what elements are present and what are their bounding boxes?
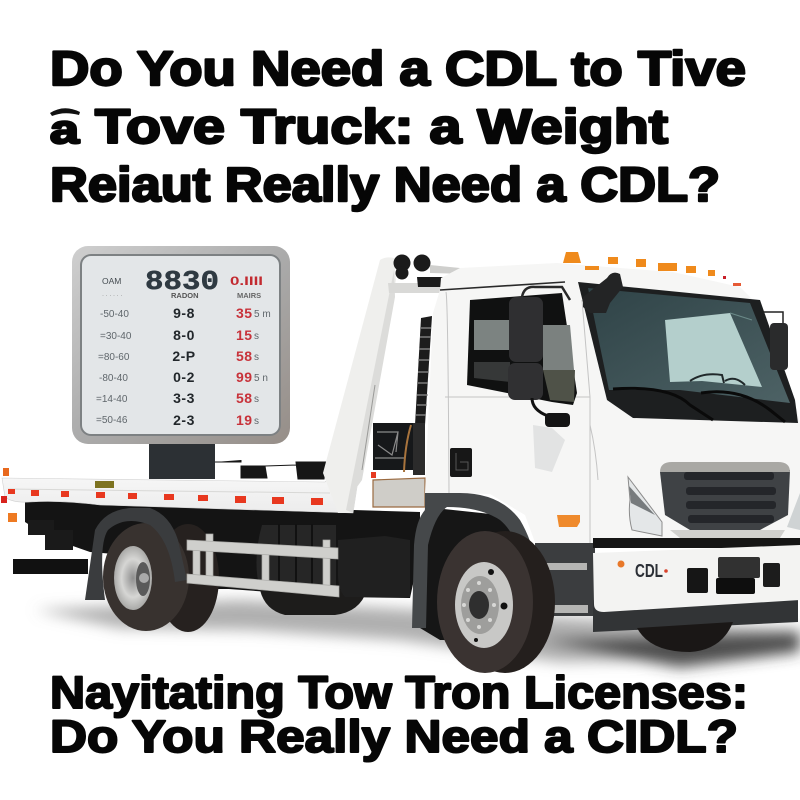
side window xyxy=(467,293,577,405)
sign board xyxy=(72,246,290,479)
sign table rows: s xyxy=(254,416,259,427)
rear lights xyxy=(3,468,9,476)
battery box xyxy=(338,536,410,597)
sign screen xyxy=(82,256,279,434)
ground shadow xyxy=(35,600,800,668)
hitch blocks xyxy=(28,520,73,550)
sign table rows: 15 xyxy=(236,327,253,343)
sign table rows: s xyxy=(254,394,259,405)
sign table rows: s xyxy=(254,331,259,342)
cab body xyxy=(425,252,800,548)
fuel tank xyxy=(256,524,336,590)
sign header readout xyxy=(102,268,263,300)
arch cavity xyxy=(420,507,537,640)
front tyre xyxy=(437,531,555,673)
bottom title xyxy=(50,667,748,762)
top title: Reiaut Really Need a CDL? xyxy=(50,159,720,212)
sign table rows: =14-40 xyxy=(96,394,128,405)
top title: a xyxy=(50,108,80,152)
sign table rows: 19 xyxy=(236,412,253,428)
sign header readout: OAM xyxy=(102,276,121,286)
cab steps xyxy=(538,563,587,570)
front rim xyxy=(455,562,513,648)
bumper body xyxy=(593,545,800,612)
sign table rows: 35 xyxy=(236,305,253,321)
chassis underside xyxy=(25,500,420,598)
bottom title: Nayitating Tow Tron Licenses: xyxy=(50,667,748,718)
rear chassis and running gear xyxy=(13,500,420,632)
sign table rows: 5 n xyxy=(254,373,268,384)
sign header readout: RADON xyxy=(171,291,198,300)
sign table rows: 8-0 xyxy=(173,327,195,343)
flatbed deck xyxy=(1,468,357,522)
roof lights xyxy=(563,252,741,286)
deck yellow label xyxy=(95,481,114,488)
bumper openings xyxy=(687,568,708,593)
top title: Do You Need a CDL to Tive xyxy=(50,43,746,96)
sign table rows: =80-60 xyxy=(98,352,130,363)
rear dual tyre xyxy=(157,524,219,632)
door seams xyxy=(445,292,598,543)
roof seam xyxy=(440,282,565,290)
headlight right xyxy=(787,493,800,530)
sign table rows: =50-46 xyxy=(96,415,128,426)
side guard rails xyxy=(187,534,339,597)
chassis strip xyxy=(593,538,800,548)
sign table rows: 58 xyxy=(236,390,253,406)
windshield frame xyxy=(578,282,798,423)
sign table rows: 99 xyxy=(236,369,253,385)
sign table rows: 9-8 xyxy=(173,305,195,321)
door handle xyxy=(450,448,472,477)
bumper CDL lettering: CDL xyxy=(635,561,663,581)
sign header readout: 0.IIII xyxy=(230,274,263,288)
front bumper xyxy=(593,538,800,652)
sign header readout: · · · · · · xyxy=(102,293,122,299)
bumper lamp xyxy=(618,560,624,568)
sign table rows: 3-3 xyxy=(173,390,195,406)
wipers xyxy=(613,388,785,422)
sign table rows: 58 xyxy=(236,348,253,364)
windshield glass xyxy=(588,288,790,403)
rear fender xyxy=(85,508,187,600)
headlight left xyxy=(628,477,662,536)
work lights xyxy=(394,254,447,287)
machinery behind headboard xyxy=(215,316,432,479)
rear hitch bar xyxy=(13,559,88,574)
sign header readout: MAIRS xyxy=(237,291,261,300)
sign table rows: =30-40 xyxy=(100,331,132,342)
sign table rows: 2-3 xyxy=(173,412,195,428)
rear storage box xyxy=(373,478,425,507)
sign table rows xyxy=(96,305,271,428)
mirror shadow on door xyxy=(533,425,565,472)
sign table rows: 5 m xyxy=(254,309,271,320)
main side mirror xyxy=(508,287,570,427)
windshield reflection xyxy=(665,313,762,387)
sign table rows: -50-40 xyxy=(100,309,129,320)
rear rim xyxy=(114,546,152,610)
ribbed hoses xyxy=(415,316,432,425)
top title: Tove Truck: a Weight xyxy=(95,101,668,154)
crossbars xyxy=(388,283,440,293)
bottom title: Do You Really Need a CIDL? xyxy=(50,711,738,762)
rear tyre xyxy=(103,523,189,631)
top convex mirror xyxy=(583,273,623,313)
headboard tower xyxy=(323,254,470,513)
sign post xyxy=(149,442,215,479)
side marker xyxy=(557,515,580,527)
deck reflectors xyxy=(8,489,323,505)
license plate xyxy=(718,557,760,578)
front wheel arch and steps xyxy=(412,493,595,640)
deck orange plate xyxy=(332,481,344,495)
deck winch box xyxy=(215,460,327,479)
fender band xyxy=(412,493,538,628)
sign header readout: 8830 xyxy=(145,268,219,298)
step well xyxy=(535,543,595,616)
front axle shadow xyxy=(637,622,733,652)
sign table rows: s xyxy=(254,352,259,363)
right side mirror xyxy=(763,312,788,370)
steering wheel xyxy=(690,374,745,385)
sign table rows: 0-2 xyxy=(173,369,195,385)
sign frame xyxy=(72,246,290,444)
mid axle tyre xyxy=(260,590,367,615)
top title xyxy=(50,43,746,212)
lower bumper xyxy=(593,600,798,632)
front grille xyxy=(660,462,790,538)
sign table rows: -80-40 xyxy=(99,373,128,384)
sign table rows: 2-P xyxy=(172,348,196,364)
